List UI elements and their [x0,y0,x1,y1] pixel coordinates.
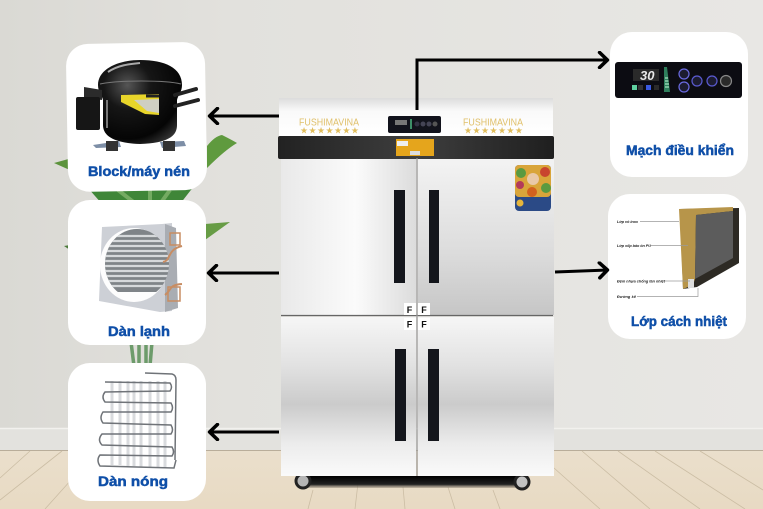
panel: Dàn lạnh [68,200,206,345]
icon: condenser unit [99,223,182,312]
F logos [404,303,430,330]
F logos: F [407,305,413,315]
plant behind panels [54,135,237,366]
black band [278,136,554,159]
icon: wire-tube coil [98,373,176,468]
arrow: to Block/máy nén [209,114,279,118]
arrow: to Mạch điều khiển [417,60,608,110]
F logos: F [407,320,413,330]
heading: Block/máy nén: Block/máy nén [88,163,190,179]
yellow spec label [396,139,434,156]
F logos: F [421,305,427,315]
control display [388,116,441,133]
panel: Lớp cách nhiệt [608,194,746,339]
callout labels [617,220,666,299]
callout labels: Đường kẽ [617,295,637,299]
arrow: to Dàn lạnh [208,272,279,274]
F logos: F [421,320,427,330]
panel: Mạch điều khiển [610,32,748,177]
lower doors [281,317,554,476]
top panel [279,98,553,136]
arrow: to Dàn nóng [209,430,279,434]
heading: Mạch điều khiển: Mạch điều khiển [626,142,734,158]
brand logo right: FUSHIMAVINA [463,118,523,128]
door handles [394,190,439,441]
arrow: to Lớp cách nhiệt [555,270,608,272]
callout labels: Đệm nhựa chống tản nhiệt [617,280,666,284]
icon: compressor [76,60,198,151]
icon: control panel: 30 [640,68,655,83]
brand logo right: ★★★★★★★ [464,126,523,136]
fruit and vegetable sticker [515,165,551,211]
heading: Lớp cách nhiệt: Lớp cách nhiệt [631,313,727,329]
callout labels: Lớp xốp bảo ôn PU [617,244,651,248]
icon: insulation cross-section [617,207,739,299]
heading: Dàn nóng: Dàn nóng [98,473,168,489]
cabinet shadow and wheels [294,472,530,490]
upper doors [281,159,554,315]
brand logo left [299,118,359,136]
icon: control panel [615,62,742,98]
brand logo left: ★★★★★★★ [300,126,359,136]
heading: Dàn lạnh: Dàn lạnh [108,323,170,339]
refrigerator [278,98,554,490]
brand logo right [463,118,523,136]
brand logo left: FUSHIMAVINA [299,118,359,128]
panel: Block/máy nén [66,42,207,192]
panel: Dàn nóng [68,363,206,501]
callout labels: Lớp vỏ inox [617,220,639,224]
